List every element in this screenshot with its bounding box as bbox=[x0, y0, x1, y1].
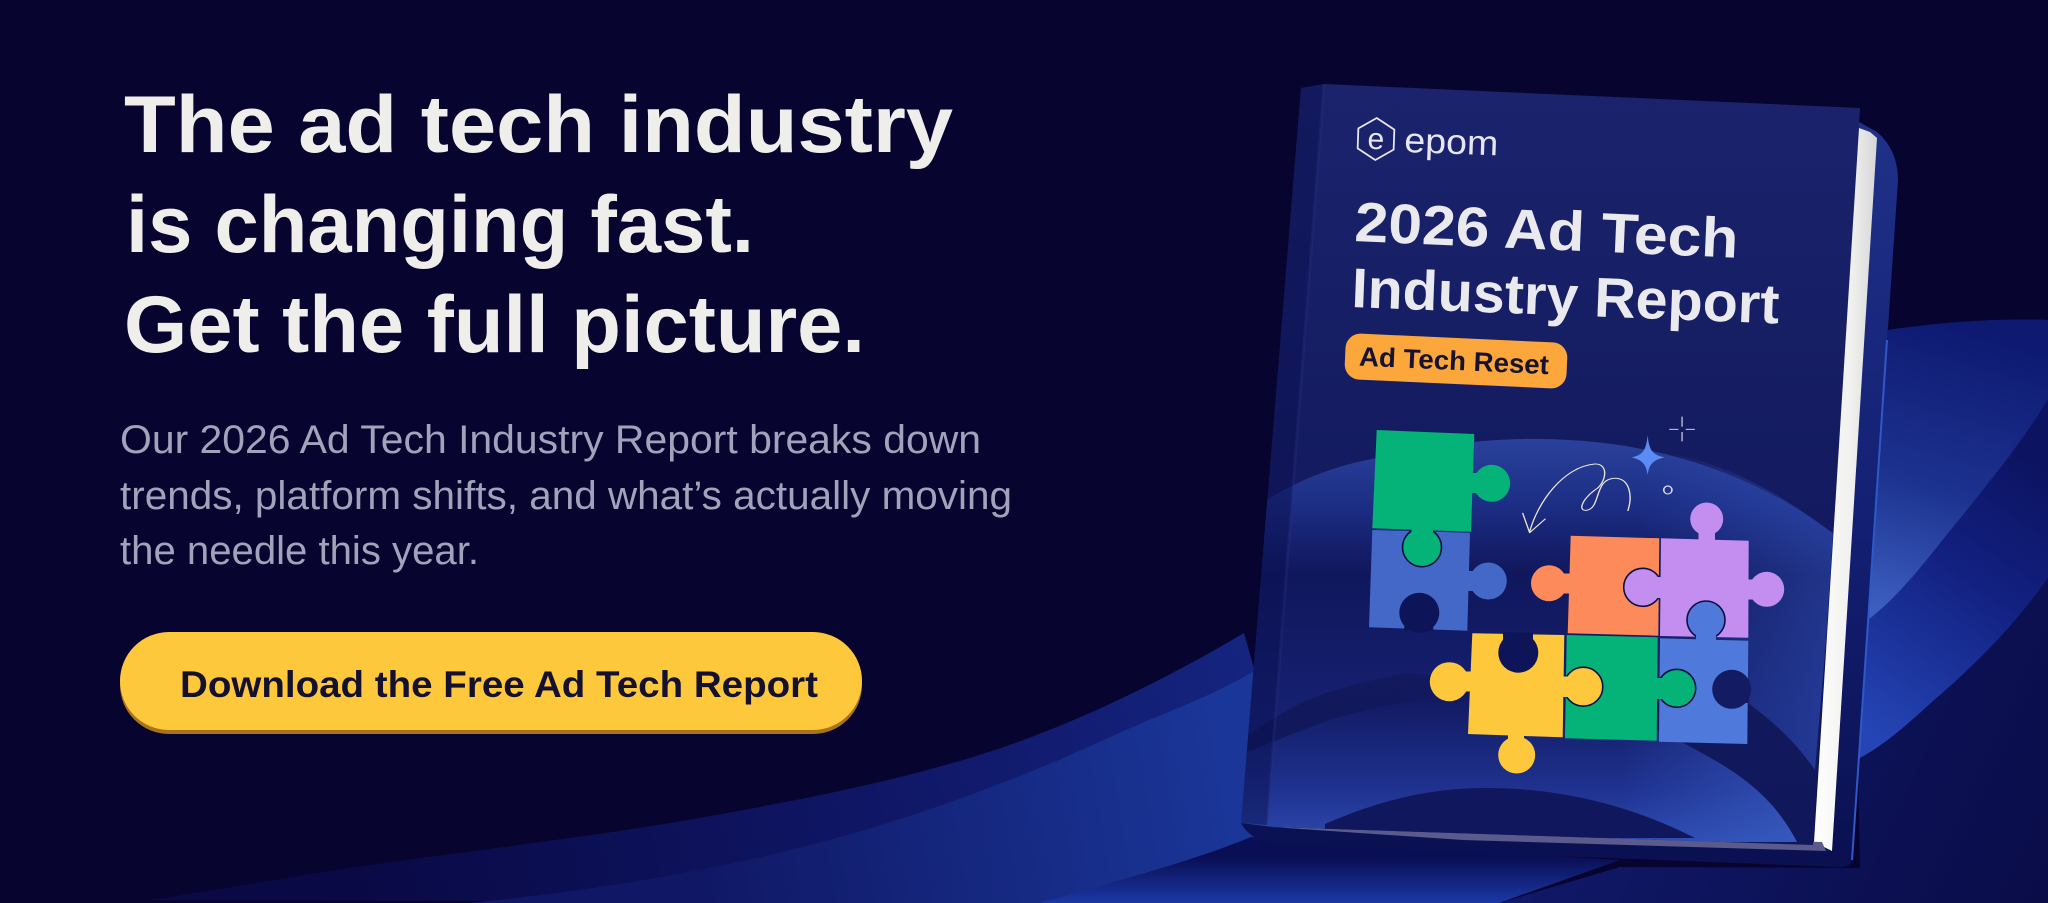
back cover bbox=[1241, 122, 1898, 867]
logo: epom hexagon bbox=[1357, 117, 1395, 161]
page block bbox=[1814, 128, 1877, 851]
icon: curly arrow bbox=[1523, 464, 1630, 533]
puzzle piece: purple bbox=[1624, 502, 1784, 638]
puzzle piece: green lower bbox=[1565, 635, 1658, 741]
doodles bbox=[1523, 417, 1695, 533]
headline: is changing fast. bbox=[126, 180, 754, 270]
download button bbox=[120, 632, 862, 734]
puzzle piece: blue left bbox=[1369, 526, 1507, 633]
headline: Get the full picture. bbox=[124, 280, 865, 370]
headline bbox=[124, 80, 953, 370]
background waves bbox=[150, 319, 2048, 903]
body paragraph: the needle this year. bbox=[120, 529, 479, 573]
report book bbox=[1240, 84, 1898, 867]
back cover edge highlight bbox=[1852, 340, 1887, 860]
page block bottom bbox=[1272, 827, 1826, 851]
body paragraph: trends, platform shifts, and what’s actually moving bbox=[120, 474, 1012, 518]
puzzle piece: yellow bbox=[1430, 632, 1603, 774]
puzzle illustration bbox=[1369, 417, 1784, 774]
body paragraph bbox=[120, 418, 1012, 573]
puzzle piece: blue right bbox=[1654, 601, 1751, 744]
icon: blue sparkle bbox=[1632, 435, 1665, 475]
puzzle piece: green top bbox=[1372, 430, 1510, 532]
download button: Download the Free Ad Tech Report bbox=[180, 664, 818, 705]
icon: small ring bbox=[1664, 486, 1672, 494]
headline: The ad tech industry bbox=[124, 80, 953, 170]
badge: Ad Tech Reset: Ad Tech Reset bbox=[1358, 342, 1550, 380]
spine crease bbox=[1241, 84, 1324, 825]
front cover bbox=[1241, 84, 1860, 845]
icon: small cross bbox=[1669, 417, 1695, 441]
cover title bbox=[1351, 190, 1781, 335]
cover title: 2026 Ad Tech bbox=[1353, 190, 1740, 270]
puzzle piece: orange bbox=[1531, 536, 1659, 636]
logo wordmark: epom bbox=[1404, 121, 1499, 163]
body paragraph: Our 2026 Ad Tech Industry Report breaks down bbox=[120, 418, 981, 462]
logo: epom hexagon: e bbox=[1367, 123, 1385, 156]
cover title: Industry Report bbox=[1351, 256, 1781, 335]
cover artwork arcs bbox=[1240, 84, 1835, 842]
badge: Ad Tech Reset bbox=[1344, 333, 1568, 389]
